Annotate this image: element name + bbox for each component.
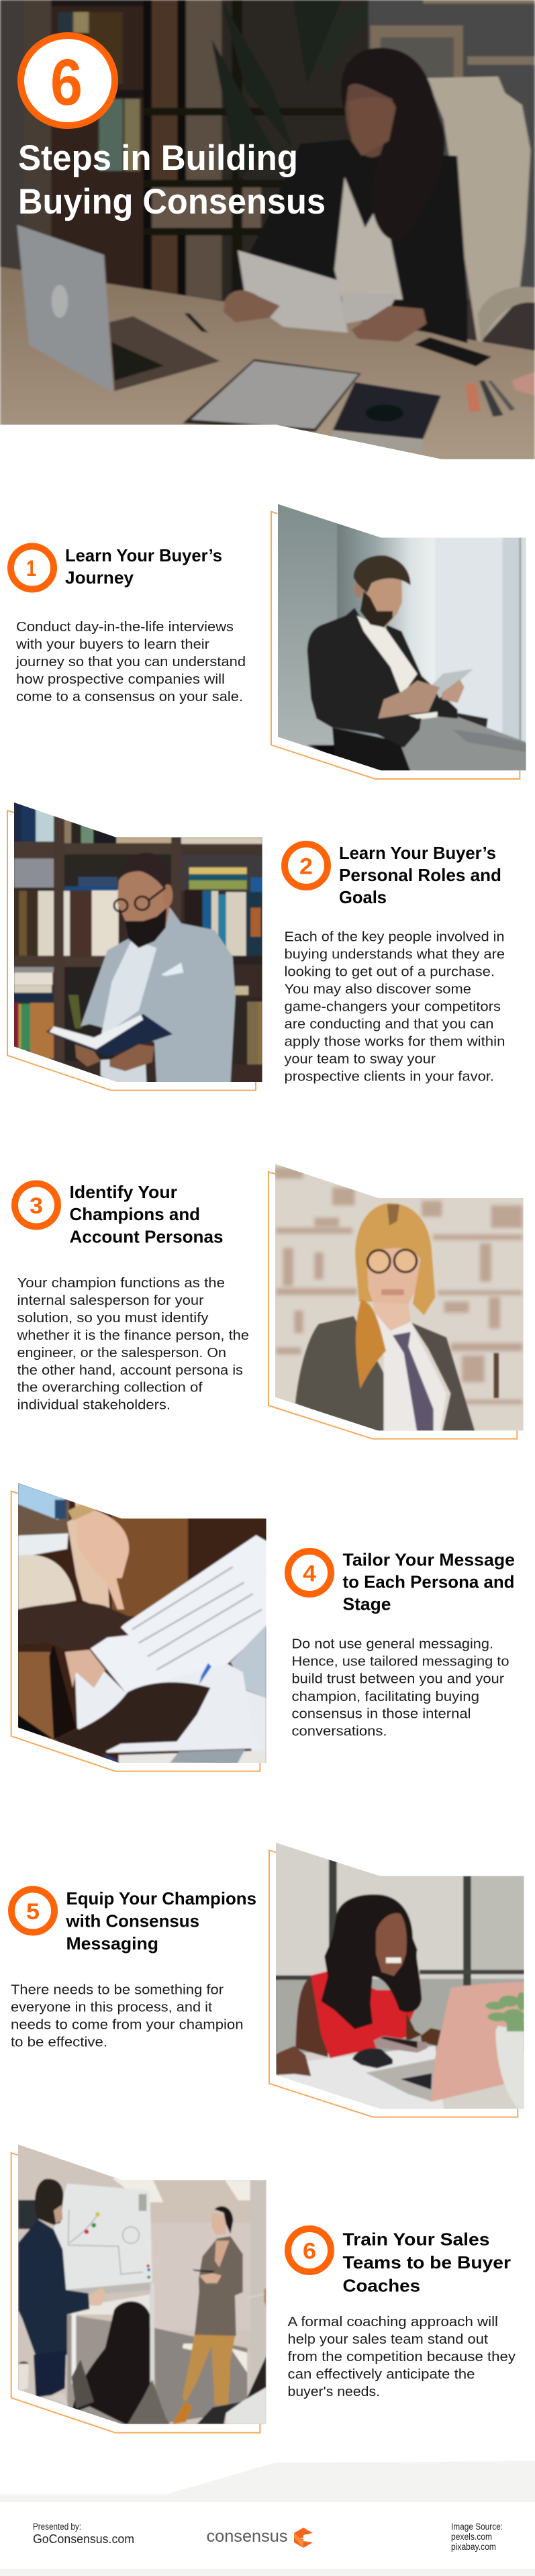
- text block: step 3: the other hand, account persona is: [17, 1363, 243, 1378]
- heading: step 6: Coaches: [342, 2275, 420, 2295]
- text block: step 5: [11, 1982, 243, 2050]
- photo: smiling woman at laptop: [269, 1833, 527, 2117]
- icon: number 2 badge: 2: [299, 854, 313, 880]
- text block: step 3: individual stakeholders.: [17, 1397, 171, 1413]
- text block: step 2: You may also discover some: [285, 982, 471, 997]
- heading: step 5: [66, 1888, 256, 1953]
- icon: number 4 badge: 4: [303, 1561, 316, 1586]
- step 3: [15, 1158, 527, 1439]
- text block: step 3: [16, 1275, 249, 1413]
- text block: step 4: build trust between you and your: [291, 1671, 504, 1687]
- text block: step 2: prospective clients in your favor.: [285, 1069, 494, 1084]
- heading: step 3: Identify Your: [70, 1182, 177, 1202]
- heading: step 3: Champions and: [70, 1204, 200, 1224]
- heading: step 6: [342, 2229, 511, 2295]
- hero panel: [0, 0, 535, 470]
- text block: step 1: with your buyers to learn their: [15, 637, 209, 652]
- heading: step 4: to Each Persona and: [342, 1571, 514, 1592]
- text block: step 3: solution, so you must identify: [17, 1310, 209, 1326]
- icon: number 6 badge: [288, 2229, 331, 2272]
- logo: consensus: consensus: [207, 2527, 287, 2546]
- icon: number 1 badge: 1: [26, 556, 36, 582]
- step 6: [11, 2140, 516, 2433]
- text block: step 5: There needs to be something for: [11, 1982, 224, 1997]
- heading: step 4: [342, 1550, 515, 1614]
- icon: number 5 badge: 5: [26, 1899, 40, 1925]
- heading: step 1: Journey: [65, 567, 134, 588]
- step 1: [11, 497, 529, 779]
- icon: number 3 badge: [15, 1183, 58, 1226]
- text block: step 4: champion, facilitating buying: [291, 1689, 479, 1704]
- presented by: Presented by:: [33, 2522, 81, 2532]
- text block: step 3: engineer, or the salesperson. On: [17, 1345, 226, 1361]
- hero badge: number 6: 6: [50, 46, 83, 119]
- hero title: Buying Consensus: [18, 182, 326, 222]
- heading: step 5: Messaging: [66, 1933, 158, 1953]
- text block: step 6: [287, 2314, 516, 2399]
- heading: step 6: Train Your Sales: [342, 2229, 490, 2250]
- text block: step 2: [285, 929, 505, 1084]
- heading: step 5: Equip Your Champions: [66, 1888, 256, 1908]
- text block: step 2: your team to sway your: [285, 1052, 436, 1066]
- text block: step 2: apply those works for them within: [285, 1034, 505, 1049]
- step 2: [7, 796, 505, 1091]
- text block: step 4: Do not use general messaging.: [291, 1636, 493, 1652]
- text block: step 3: the overarching collection of: [17, 1379, 203, 1395]
- heading: step 2: [339, 843, 501, 907]
- text block: step 1: how prospective companies will: [16, 672, 225, 687]
- step 4: [11, 1477, 515, 1772]
- text block: step 3: internal salesperson for your: [17, 1293, 204, 1308]
- icon: number 2 badge: [285, 844, 328, 887]
- text block: step 2: buying understands what they are: [285, 947, 505, 962]
- hero photo: woman reviewing papers at desk: [0, 0, 535, 470]
- text block: step 5: needs to come from your champion: [11, 2017, 243, 2032]
- text block: step 5: everyone in this process, and it: [11, 2000, 212, 2015]
- photo: team at whiteboard: [11, 2140, 271, 2433]
- heading: step 6: Teams to be Buyer: [342, 2252, 511, 2272]
- icon: number 6 badge: 6: [303, 2239, 316, 2264]
- text block: step 2: are conducting and that you can: [285, 1017, 494, 1031]
- photo: man with tablet: [271, 497, 529, 779]
- heading: step 4: Tailor Your Message: [342, 1550, 515, 1570]
- text block: step 6: from the competition because they: [287, 2349, 516, 2364]
- icon: number 4 badge: [288, 1551, 331, 1594]
- text block: step 1: come to a consensus on your sale.: [16, 689, 243, 704]
- text block: step 1: [15, 619, 246, 704]
- heading: step 3: Account Personas: [70, 1226, 223, 1246]
- text block: step 1: Conduct day-in-the-life interviews: [16, 619, 234, 635]
- heading: step 3: [70, 1182, 223, 1246]
- text block: step 4: conversations.: [291, 1723, 387, 1739]
- heading: step 1: [65, 545, 222, 588]
- heading: step 5: with Consensus: [66, 1911, 199, 1931]
- presented by: [33, 2522, 134, 2546]
- heading: step 2: Personal Roles and: [339, 865, 501, 885]
- text block: step 4: consensus in those internal: [291, 1706, 471, 1722]
- image source: pexels.com: [451, 2532, 492, 2542]
- text block: step 6: buyer's needs.: [287, 2384, 380, 2399]
- hero badge: number 6: [21, 36, 115, 126]
- text block: step 3: Your champion functions as the: [17, 1275, 225, 1291]
- text block: step 4: [291, 1636, 509, 1739]
- text block: step 2: Each of the key people involved in: [285, 929, 505, 944]
- text block: step 6: can effectively anticipate the: [287, 2366, 475, 2382]
- text block: step 1: journey so that you can understand: [15, 654, 246, 670]
- text block: step 5: to be effective.: [11, 2035, 107, 2050]
- icon: number 5 badge: [11, 1890, 54, 1933]
- footer base strip: [0, 2569, 535, 2576]
- hero title: Steps in Building: [18, 138, 298, 178]
- text block: step 2: game-changers your competitors: [285, 999, 501, 1014]
- heading: step 2: Goals: [339, 887, 387, 907]
- step 5: [11, 1833, 527, 2117]
- footer band: [0, 2461, 535, 2502]
- image source: Image Source:: [451, 2522, 503, 2532]
- photo: hands reviewing document: [11, 1477, 271, 1772]
- text block: step 6: help your sales team stand out: [287, 2332, 488, 2347]
- icon: consensus C mark: [294, 2528, 313, 2548]
- icon: number 3 badge: 3: [30, 1193, 43, 1219]
- heading: step 1: Learn Your Buyer’s: [65, 545, 222, 565]
- image source: [451, 2522, 503, 2552]
- text block: step 4: Hence, use tailored messaging to: [291, 1653, 509, 1669]
- hero title: [18, 138, 326, 222]
- photo: woman in suit against brick wall: [269, 1158, 527, 1439]
- text block: step 2: looking to get out of a purchase.: [285, 964, 495, 979]
- text block: step 6: A formal coaching approach will: [287, 2314, 498, 2330]
- icon: number 1 badge: [11, 547, 54, 590]
- text block: step 3: whether it is the finance person, the: [16, 1328, 249, 1343]
- image source: pixabay.com: [451, 2542, 496, 2552]
- heading: step 4: Stage: [342, 1594, 391, 1614]
- photo: man reading in library: [7, 796, 266, 1091]
- logo: consensus: [207, 2527, 313, 2548]
- footer: [0, 2461, 535, 2576]
- presented by: GoConsensus.com: [33, 2532, 134, 2546]
- heading: step 2: Learn Your Buyer’s: [339, 843, 496, 863]
